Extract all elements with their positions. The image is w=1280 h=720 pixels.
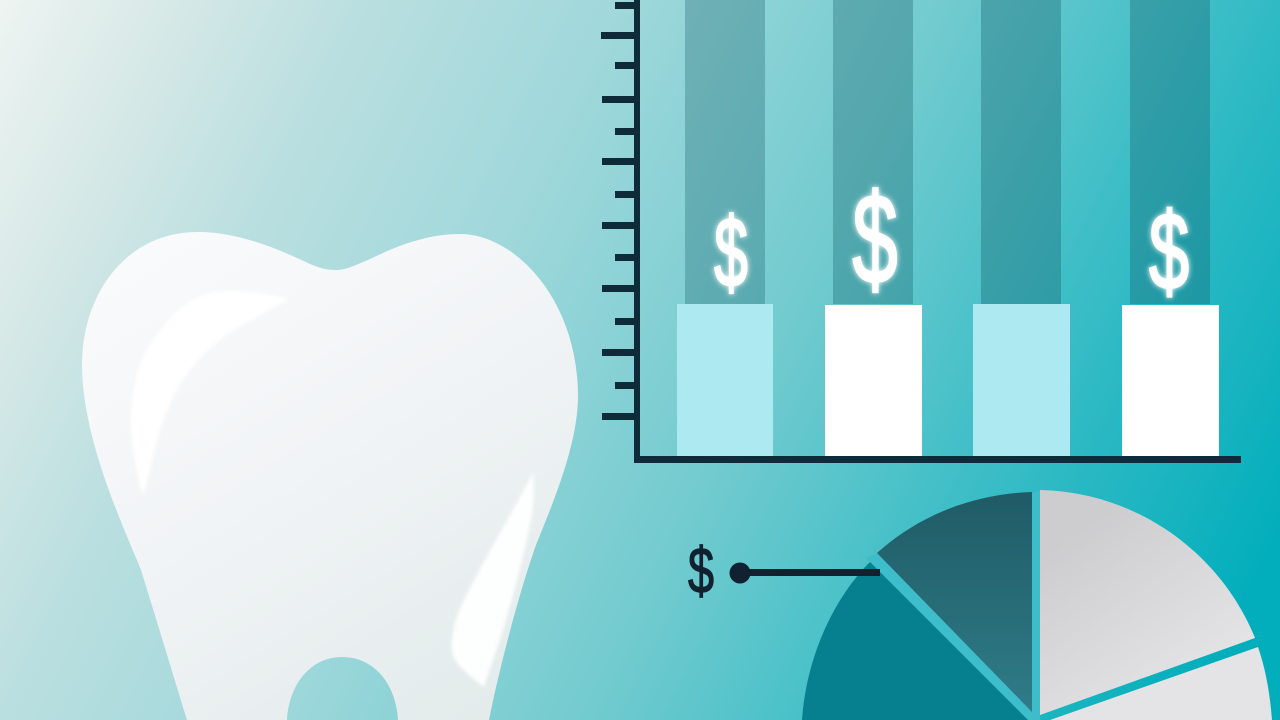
icon: tooth bbox=[82, 232, 578, 720]
glowing dollar signs: $ bbox=[852, 167, 898, 310]
bar chart bbox=[601, 0, 1241, 463]
callout: dollar sign with leader line: $ bbox=[688, 536, 714, 608]
glowing dollar signs: $ bbox=[714, 198, 748, 308]
slice: dark teal bbox=[877, 492, 1032, 712]
y axis with ticks bbox=[601, 0, 640, 463]
tooth body bbox=[82, 232, 578, 720]
slice: light grey bbox=[1050, 647, 1272, 720]
column backgrounds bbox=[685, 0, 1210, 304]
pie chart bbox=[802, 490, 1272, 720]
highlight: upper left shine bbox=[131, 291, 288, 495]
glowing dollar signs: $ bbox=[1149, 190, 1189, 313]
slice: grey bbox=[1040, 490, 1255, 715]
glowing dollar signs bbox=[714, 167, 1189, 313]
slice gap backing bbox=[866, 490, 1040, 720]
highlight: lower right shine bbox=[451, 473, 534, 687]
callout: dollar sign with leader line bbox=[688, 536, 880, 608]
slice: teal bbox=[802, 562, 1028, 720]
x axis bbox=[634, 456, 1241, 463]
bars bbox=[677, 304, 1219, 456]
